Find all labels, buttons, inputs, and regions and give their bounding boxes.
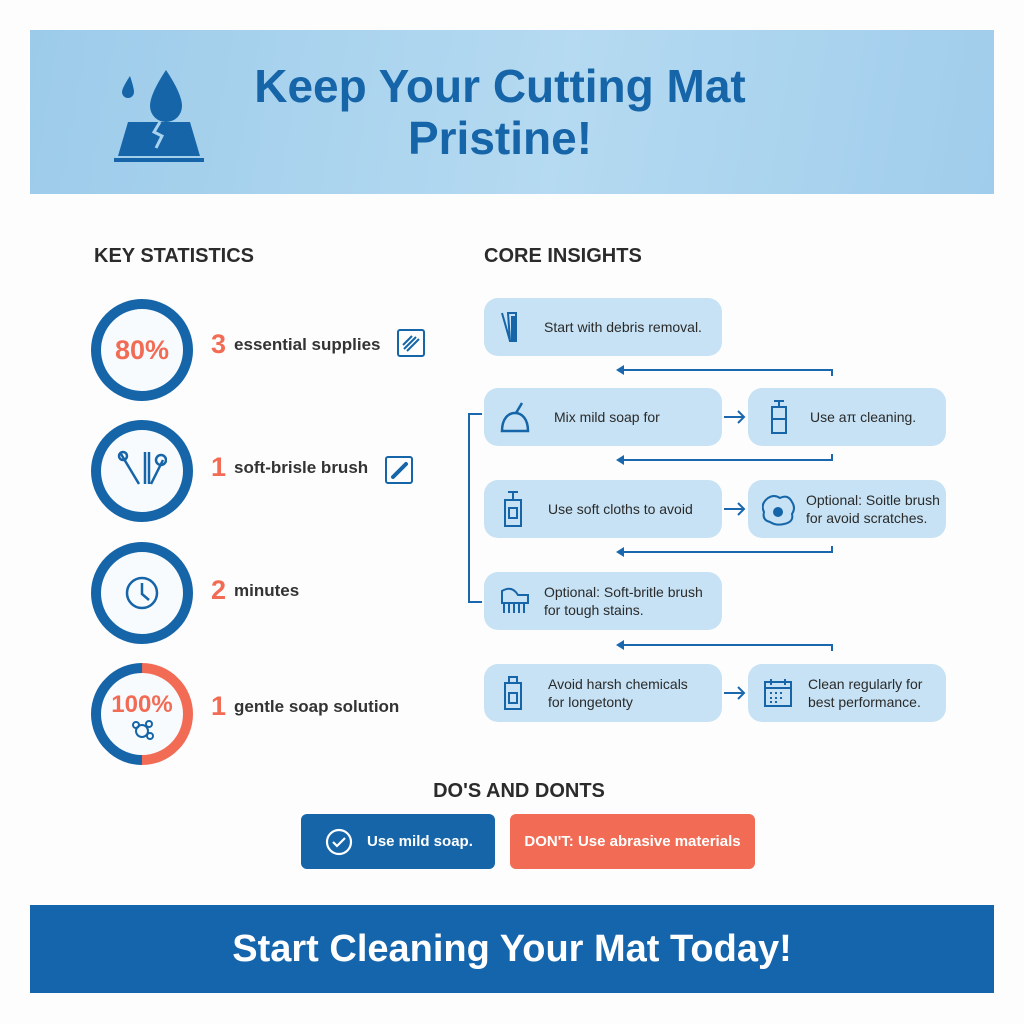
footer banner: Start Cleaning Your Mat Today! — [232, 928, 792, 970]
footer banner — [30, 905, 994, 993]
stat 3: minutes — [234, 580, 299, 600]
flowchart — [468, 298, 946, 722]
stat 2: 1 — [211, 452, 226, 482]
arrow right 4 — [724, 502, 746, 516]
step 6: Optional: Soft-britle brush — [544, 584, 703, 600]
stat 3 — [91, 542, 299, 644]
arrow right 2 — [724, 410, 746, 424]
stat 2: soft-brisle brush — [234, 458, 368, 476]
step 2: Mix mild soap for — [554, 409, 660, 425]
do button — [301, 814, 495, 869]
step 5 — [748, 480, 946, 538]
arrow back 1 — [616, 365, 833, 376]
step 5: Optional: Soitle brush — [806, 492, 940, 508]
do button: Use mild soap. — [367, 833, 473, 850]
step 4: Use soft cloths to avoid — [548, 501, 693, 517]
step 3: Use aπ cleaning. — [810, 409, 916, 425]
step 8: Clean regularly for — [808, 676, 922, 692]
stat 3: 2 — [211, 575, 226, 605]
title — [254, 60, 746, 164]
step 8 — [748, 664, 946, 722]
title: Keep Your Cutting Mat — [254, 60, 746, 112]
step 5: for avoid scratches. — [806, 510, 927, 526]
stat 4: 1 — [211, 691, 226, 721]
step 1: Start with debris removal. — [544, 319, 702, 335]
header banner — [30, 30, 994, 194]
heading: dos and donts: DO'S AND DONTS — [433, 780, 605, 802]
stat 4 — [91, 663, 399, 765]
bracket — [468, 413, 482, 603]
arrow back 2 — [616, 454, 833, 465]
step 8: best performance. — [808, 694, 921, 710]
step 7 — [484, 664, 722, 722]
icon: mat with drops — [114, 70, 204, 162]
stat 1: essential supplies — [234, 334, 380, 354]
stat 2 — [91, 420, 413, 522]
dont button — [510, 814, 755, 869]
stat 4: gentle soap solution — [234, 696, 399, 716]
step 7: for longetonty — [548, 694, 633, 710]
title: Pristine! — [408, 112, 592, 164]
arrow back 3 — [616, 546, 833, 557]
stat 1: 80% — [115, 334, 169, 364]
stat 4: 100% — [111, 691, 173, 718]
step 1 — [484, 298, 722, 356]
step 6: for tough stains. — [544, 602, 644, 618]
arrow right 7 — [724, 686, 746, 700]
step 6 — [484, 572, 722, 630]
arrow back 4 — [616, 640, 833, 651]
heading: key statistics: KEY STATISTICS — [94, 245, 254, 267]
step 3 — [748, 388, 946, 446]
stat 1: 3 — [211, 329, 226, 359]
dont button: DON'T: Use abrasive materials — [524, 833, 741, 850]
step 4 — [484, 480, 722, 538]
step 2 — [484, 388, 722, 446]
stat 1 — [91, 299, 425, 401]
step 7: Avoid harsh chemicals — [548, 676, 688, 692]
heading: core insights: CORE INSIGHTS — [484, 245, 642, 267]
